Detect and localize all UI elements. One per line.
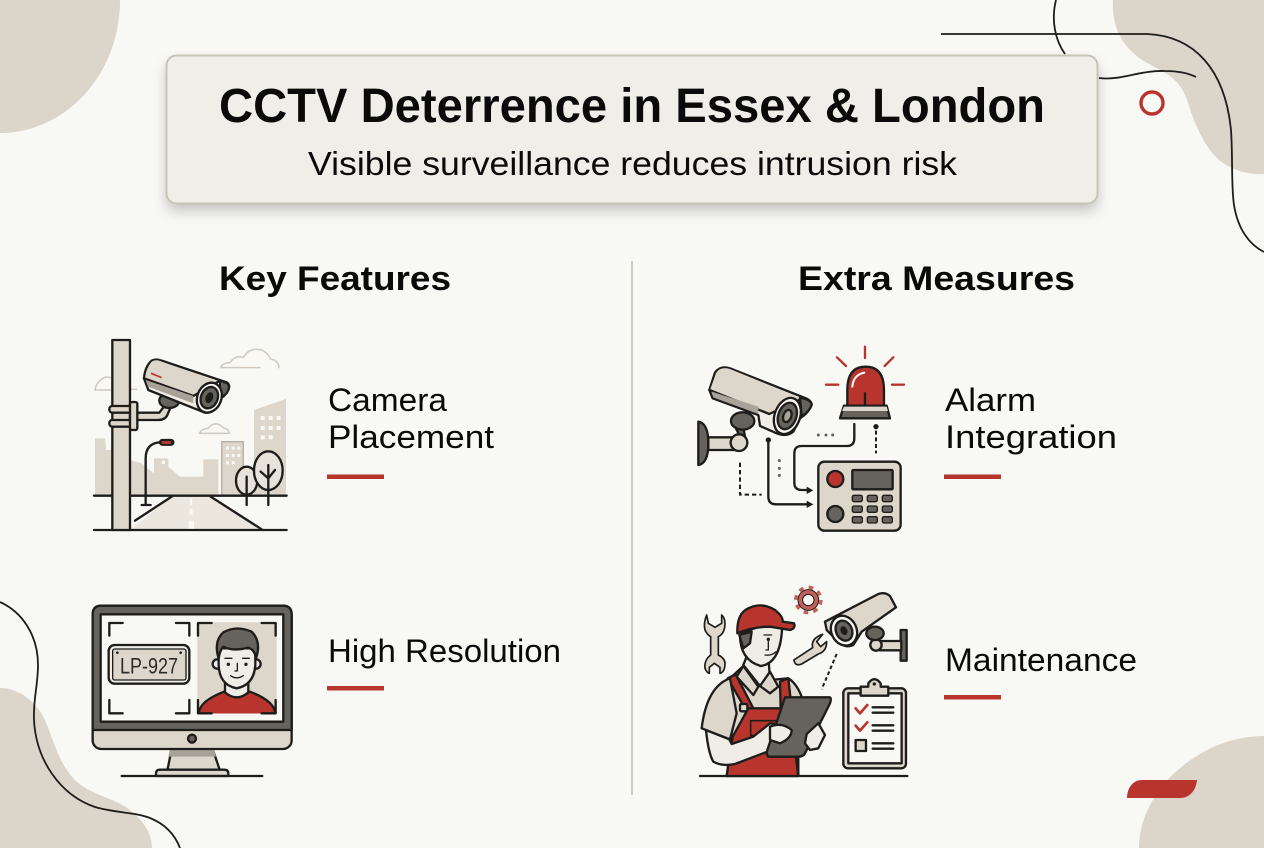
icon: maintenance technician — [700, 587, 907, 776]
center divider — [631, 261, 633, 795]
decorative curve: bottom left — [0, 602, 180, 848]
blob: top right — [1113, 0, 1264, 174]
red ring — [1141, 92, 1163, 114]
label: alarm integration — [944, 382, 1117, 479]
red underline — [944, 695, 1001, 700]
icon: monitor with plate and face recognition: LP-927 — [120, 653, 178, 678]
title card — [166, 56, 1098, 204]
red underline — [327, 686, 384, 690]
red underline — [327, 474, 384, 479]
label: camera placement — [327, 382, 494, 479]
label: camera placement: Placement — [328, 419, 494, 455]
decorative curve: top arc — [1054, 0, 1065, 54]
blob: bottom left — [0, 688, 152, 848]
title: CCTV Deterrence in Essex & London — [219, 80, 1045, 133]
label: alarm integration: Integration — [945, 419, 1117, 455]
decorative curve: top right — [941, 34, 1264, 252]
label: maintenance: Maintenance — [945, 642, 1137, 678]
heading: extra measures: Extra Measures — [798, 260, 1075, 298]
decorative curve: wave by card — [1099, 71, 1196, 79]
label: alarm integration: Alarm — [945, 382, 1036, 418]
blob: bottom right — [1139, 736, 1264, 848]
label: maintenance — [944, 642, 1137, 700]
label: high resolution: High Resolution — [328, 633, 561, 669]
label: camera placement: Camera — [328, 382, 447, 418]
red accent slash — [1127, 780, 1197, 798]
icon: monitor with plate and face recognition — [93, 606, 292, 776]
heading: key features: Key Features — [219, 260, 451, 298]
label: high resolution — [327, 633, 561, 690]
icon: street camera scene — [94, 340, 287, 530]
icon: camera, siren and control panel — [698, 347, 904, 531]
red underline — [944, 474, 1001, 479]
subtitle: Visible surveillance reduces intrusion risk — [308, 145, 958, 182]
blob: top left — [0, 0, 120, 133]
